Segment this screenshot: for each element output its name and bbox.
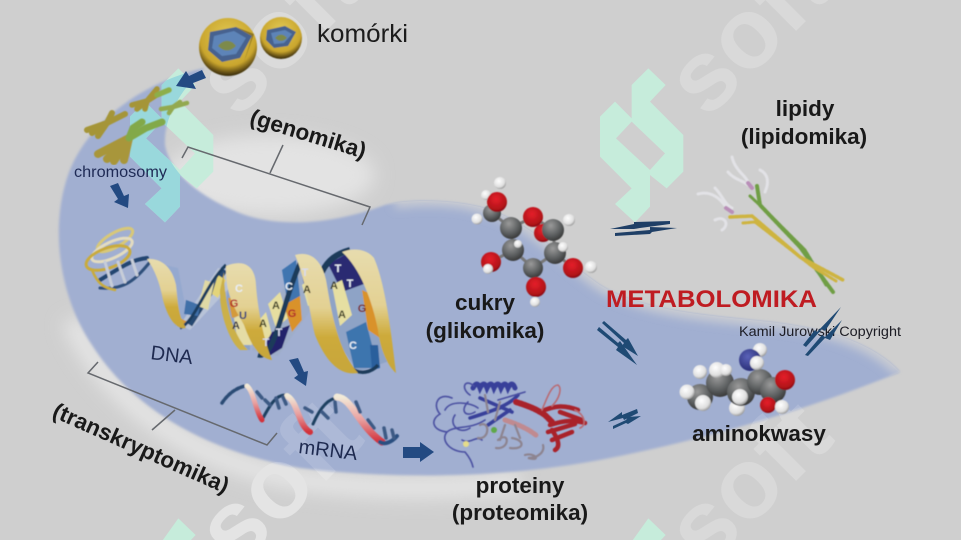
chromosomes — [87, 89, 187, 161]
arrow: cell to chromosomes — [176, 70, 206, 89]
grey coils — [478, 395, 543, 459]
label: copyright: Kamil Jurowski Copyright — [739, 324, 901, 339]
base letters: C — [235, 283, 243, 295]
label: cukry: cukry — [455, 290, 516, 315]
chromosome large green arms — [129, 122, 162, 138]
gold ribbons — [147, 259, 186, 328]
left coil — [83, 224, 150, 290]
blob: metabolism curve — [59, 68, 900, 475]
bracket: genomika — [182, 145, 370, 225]
base letters: T — [335, 263, 342, 275]
arrow: DNA to mRNA — [289, 358, 308, 386]
label: mRNA: mRNA — [297, 436, 359, 465]
arrows: amino acid to protein equilibrium — [608, 409, 641, 429]
hump 5 bases — [322, 252, 392, 372]
base letters: A — [303, 284, 311, 296]
chromosome small green — [161, 102, 187, 113]
hump 3 bases — [226, 270, 250, 350]
label: lipidy: lipidy — [776, 96, 835, 121]
base letters: C — [349, 340, 357, 352]
base letters: A — [330, 280, 338, 292]
base letters: T — [263, 337, 270, 349]
label: aminokwasy: aminokwasy — [692, 421, 826, 446]
arrow: mRNA to protein — [403, 442, 434, 462]
label: transkryptomika: (transkryptomika) — [49, 398, 233, 498]
label: proteomika: (proteomika) — [452, 500, 588, 525]
base letters: G — [288, 308, 296, 320]
icon: cells — [199, 17, 302, 76]
big cell — [199, 18, 257, 76]
molecule: protein — [434, 383, 585, 467]
molecule: sugar — [472, 177, 597, 307]
arrow: chromosomes to DNA — [110, 183, 129, 208]
bracket: transkryptomika — [88, 362, 277, 445]
base letters: T — [276, 327, 283, 339]
red domain — [505, 385, 585, 450]
base letters: A — [272, 300, 280, 312]
watermark logo: upper left — [130, 68, 213, 222]
hump 2 fill — [180, 268, 232, 330]
label: chromosomy: chromosomy — [74, 164, 167, 181]
label: proteiny: proteiny — [476, 473, 565, 498]
label: glikomika: (glikomika) — [426, 318, 544, 343]
label: DNA: DNA — [149, 342, 195, 369]
base letters: G — [358, 303, 366, 315]
base letters: A — [338, 309, 346, 321]
mRNA strand — [222, 386, 397, 443]
chromosome small left — [87, 113, 125, 136]
watermarks inside blob — [277, 402, 801, 471]
arrows: sugar to lipid equilibrium — [610, 221, 677, 236]
arrows: sugar to protein equilibrium — [597, 321, 638, 365]
base letters: A — [259, 318, 267, 330]
hump 1 fill — [152, 262, 188, 326]
label: komorki: komórki — [317, 20, 408, 48]
watermark logo: bottom left — [145, 518, 197, 540]
label: lipidomika: (lipidomika) — [741, 124, 867, 149]
chromosome large — [98, 138, 129, 161]
light halo around curve — [72, 135, 520, 488]
watermark logo: bottom right — [615, 518, 667, 540]
small cell — [260, 17, 302, 59]
base letters: C — [285, 281, 293, 293]
base letters: T — [347, 278, 354, 290]
hump 4 bases — [252, 262, 318, 356]
molecule: amino acid — [680, 343, 795, 416]
chromosome upper — [132, 89, 169, 109]
base letters: G — [230, 298, 238, 310]
blue domain — [434, 383, 525, 467]
molecule: lipid — [698, 157, 843, 292]
soft fade on upper right of blob — [395, 200, 900, 372]
base letters: A — [232, 320, 240, 332]
base letters: U — [239, 310, 247, 322]
base letters: T — [302, 267, 309, 279]
watermark logo: upper right — [600, 68, 683, 222]
DNA helix — [83, 224, 396, 373]
dark backbones — [180, 265, 226, 328]
base letters — [230, 263, 366, 352]
label: METABOLOMIKA: METABOLOMIKA — [606, 286, 817, 313]
label: genomika: (genomika) — [247, 104, 369, 163]
arrows: amino acid to lipid equilibrium — [803, 307, 842, 356]
